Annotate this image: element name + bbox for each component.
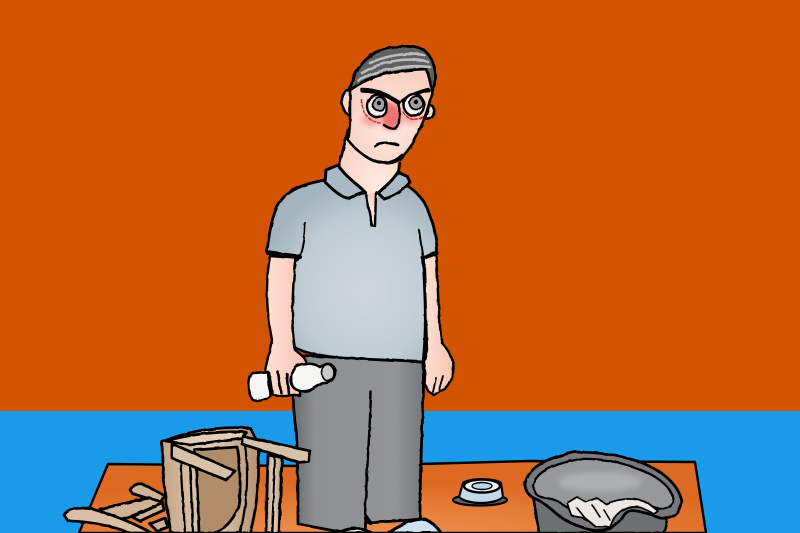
- fingers right: [433, 376, 443, 392]
- cheeks: [362, 102, 421, 130]
- chair back panel: [195, 447, 240, 533]
- collar left: [325, 165, 365, 198]
- bucket: [525, 452, 682, 533]
- chair rail right: [242, 436, 310, 462]
- ear left: [342, 90, 353, 116]
- sleeve hems: [268, 253, 437, 258]
- mouth: [375, 143, 398, 146]
- chair rail left: [172, 444, 235, 480]
- eyebrow left: [362, 90, 399, 103]
- rag folds: [577, 505, 610, 520]
- arm left: [265, 256, 306, 396]
- rug: [79, 461, 706, 533]
- background wall: [0, 0, 800, 412]
- broken chair: [64, 428, 310, 533]
- trousers: [293, 355, 423, 533]
- eye right: [404, 94, 424, 116]
- man: [249, 46, 453, 533]
- bucket rim: [525, 452, 682, 531]
- chair back leg: [266, 455, 282, 533]
- hair strands: [358, 54, 430, 80]
- background floor: [0, 411, 800, 533]
- rag: [567, 497, 658, 527]
- placket: [366, 192, 376, 226]
- ear right: [425, 106, 434, 119]
- chair top edge: [166, 432, 246, 445]
- eyebrow right: [403, 90, 428, 101]
- nose: [384, 104, 399, 129]
- eye bags: [362, 100, 424, 123]
- chin: [367, 155, 402, 163]
- chair slats: [181, 445, 247, 533]
- bottle cap on rug: [453, 479, 507, 506]
- neck: [338, 120, 420, 226]
- shirt: [267, 180, 437, 362]
- bucket inside: [533, 459, 673, 522]
- eye left: [367, 95, 387, 117]
- neck outline: [339, 130, 400, 175]
- hair: [350, 46, 436, 92]
- chair back frame: [162, 428, 259, 533]
- shirt sleeve seams: [300, 223, 423, 258]
- collar right: [378, 172, 410, 199]
- shoe right: [388, 519, 441, 533]
- arm right: [424, 253, 453, 395]
- bottle end: [249, 372, 270, 401]
- bucket highlight: [558, 472, 642, 492]
- head: [348, 68, 432, 163]
- fingers left: [269, 372, 289, 394]
- bottle body: [291, 364, 335, 391]
- shoe left: [338, 528, 372, 533]
- bucket body: [533, 495, 668, 533]
- back leg seam: [272, 457, 275, 533]
- chair legs: [64, 484, 168, 533]
